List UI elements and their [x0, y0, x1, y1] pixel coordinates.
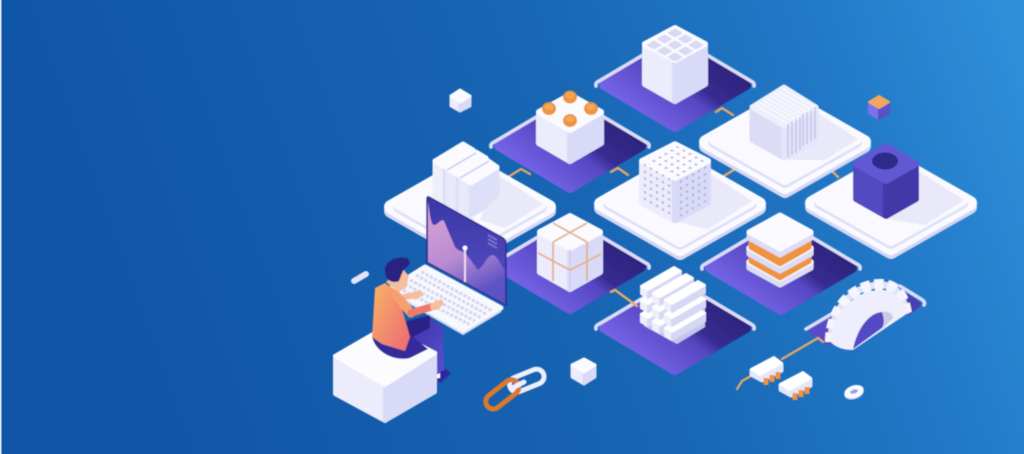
- seat cube: [335, 327, 435, 421]
- laptop: [390, 197, 506, 334]
- person legs: [404, 315, 451, 383]
- hair: [385, 258, 410, 282]
- cube: orange studs: [539, 90, 601, 161]
- seat waist: [372, 330, 428, 359]
- small cube top: [451, 90, 470, 111]
- keyboard base: [390, 267, 501, 331]
- pill: [354, 274, 366, 281]
- far arm: [404, 295, 417, 297]
- ring: [843, 383, 865, 402]
- connector blocks: [751, 357, 811, 400]
- gear pit right: [900, 288, 923, 316]
- cube: strapped parcel: [538, 216, 601, 290]
- gear hole: [853, 312, 884, 349]
- torso: [372, 283, 410, 351]
- cube: small orange top: [869, 96, 889, 119]
- cube: nine cells: [645, 28, 705, 101]
- gear pit left: [807, 308, 845, 345]
- stack with orange layers: [749, 215, 811, 285]
- neck and face: [386, 268, 409, 292]
- cube: stacked slices: [752, 87, 816, 158]
- person: [372, 258, 444, 359]
- bar blocks: [641, 267, 705, 344]
- small cube bottom: [572, 359, 595, 384]
- cube: purple with hole: [856, 146, 916, 216]
- screen chart: [428, 202, 505, 304]
- white tiles: [391, 97, 970, 256]
- gear wire: [737, 338, 823, 389]
- pit tiles: [491, 36, 860, 370]
- laptop screen: [427, 197, 506, 305]
- book slabs: [435, 144, 497, 230]
- hands: [430, 299, 444, 310]
- cube: dotted: [642, 144, 708, 220]
- connector wires: [508, 108, 838, 306]
- gear: [806, 285, 925, 350]
- chain link: [483, 367, 546, 412]
- arm: [396, 295, 411, 313]
